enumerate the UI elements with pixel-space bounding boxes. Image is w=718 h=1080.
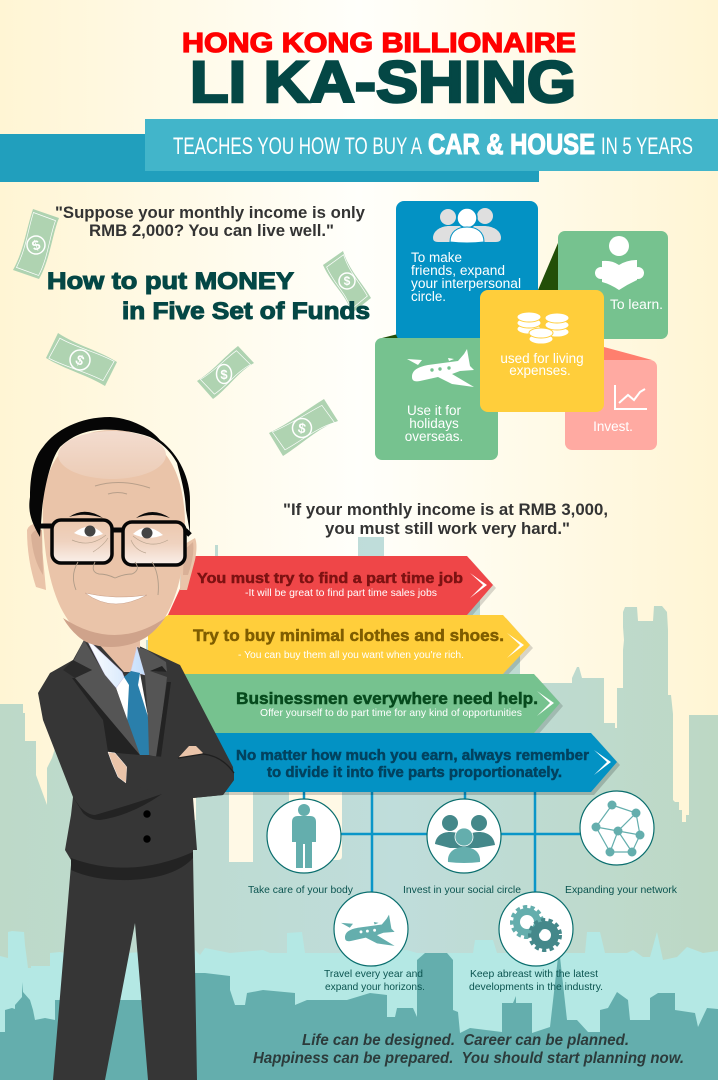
buttons — [143, 810, 151, 818]
panel: five funds cards — [375, 201, 668, 460]
eyes — [74, 527, 163, 538]
collar — [86, 638, 145, 688]
icon: person — [292, 816, 316, 868]
bill 3: $ — [73, 351, 87, 369]
shirt — [116, 673, 149, 755]
bill 5 — [269, 399, 338, 456]
arrow: part time job: You must try to find a part time job — [197, 570, 463, 587]
left lapel shadow — [72, 678, 140, 755]
forehead highlight — [58, 431, 166, 479]
quote: RMB 2,000: "Suppose your monthly income is only — [55, 203, 366, 222]
circle labels — [248, 884, 678, 993]
circle labels: Expanding your network — [565, 884, 678, 896]
lenses — [52, 520, 112, 563]
arrow: five parts: No matter how much you earn, always remember — [236, 747, 589, 764]
ears — [27, 524, 46, 590]
circle labels: expand your horizons. — [325, 981, 425, 993]
arrow: businessmen: Offer yourself to do part time for any kind of opportunities — [260, 707, 522, 719]
bill 2 — [323, 251, 371, 313]
forearm outline — [178, 754, 234, 773]
left hand — [108, 752, 127, 783]
card: living expenses — [480, 290, 604, 412]
flying money bills — [13, 209, 371, 456]
chin shadow — [63, 618, 165, 647]
card text: To make — [411, 250, 462, 265]
card: learn: To learn. — [610, 297, 663, 312]
banner text: TEACHES YOU HOW TO BUY A — [173, 133, 422, 160]
closing message: Happiness can be prepared. You should start planning now. — [253, 1050, 684, 1067]
banner text — [173, 129, 693, 161]
card: living expenses: used for living — [500, 351, 584, 366]
card: learn — [558, 231, 668, 339]
character: businessman — [27, 417, 234, 1080]
bill 4: $ — [220, 367, 228, 382]
hair — [29, 417, 190, 537]
connectors — [304, 790, 590, 895]
card: holidays: holidays — [409, 416, 459, 431]
right lapel edge — [156, 682, 171, 757]
bill 2: $ — [344, 274, 351, 288]
eye wrinkles — [72, 535, 168, 553]
trousers — [53, 855, 197, 1080]
circle labels: Invest in your social circle — [403, 884, 521, 896]
card: invest: Invest. — [593, 419, 633, 434]
card: living expenses: expenses. — [509, 363, 571, 378]
arrow: minimal clothes — [148, 615, 533, 677]
circle: travel — [334, 892, 408, 966]
bill 4 — [197, 346, 254, 399]
circle: body — [267, 799, 341, 873]
heading: how to put money — [47, 268, 370, 325]
mouth — [85, 593, 147, 604]
title: Li Ka-Shing: LI KA-SHING — [190, 50, 576, 115]
icon: plane — [407, 349, 474, 387]
circle: industry — [499, 892, 573, 966]
closing message — [253, 1032, 684, 1067]
right hand — [178, 746, 203, 758]
icon: network graph — [592, 800, 644, 856]
left lapel notch — [63, 660, 92, 678]
title: Hong Kong Billionaire: HONG KONG BILLIONAIRE — [182, 27, 576, 58]
skyline: middle layer — [0, 931, 718, 1080]
icon: gears — [512, 907, 560, 950]
skyline: back layer — [0, 537, 718, 1000]
card text — [411, 250, 521, 304]
quote: RMB 2,000 — [55, 203, 366, 240]
icon: coins — [517, 312, 569, 344]
card: holidays: overseas. — [405, 429, 463, 444]
quote: RMB 3,000 — [283, 500, 608, 538]
bill 1: $ — [30, 236, 43, 254]
circle: network — [580, 791, 654, 865]
circle labels: Keep abreast with the latest — [470, 968, 598, 980]
bill 1 — [13, 209, 59, 279]
jacket — [38, 640, 234, 875]
card: holidays — [375, 338, 498, 460]
card: friends — [396, 201, 538, 341]
icon: group — [435, 815, 495, 863]
card text: friends, expand — [411, 263, 505, 278]
arrow: businessmen: Businessmen everywhere need help. — [236, 689, 538, 708]
bill 5: $ — [297, 419, 307, 437]
arrow: businessmen — [150, 674, 563, 736]
banner — [0, 119, 718, 182]
circle labels: Travel every year and — [324, 968, 423, 980]
icon: line chart — [615, 385, 647, 409]
fold shadows — [538, 243, 558, 290]
card text: circle. — [411, 289, 446, 304]
eyebrows — [69, 512, 170, 518]
card text: your interpersonal — [411, 276, 521, 291]
right lapel notch — [150, 666, 167, 672]
closing message: Life can be designed. Career can be planned. — [302, 1032, 629, 1049]
crossed forearm — [117, 753, 234, 798]
sleeve crease — [73, 794, 162, 820]
left lapel — [73, 640, 140, 755]
icon: people — [433, 208, 501, 243]
face — [43, 430, 185, 645]
arrow: part time job: -It will be great to find part time sales jobs — [245, 588, 437, 599]
waist band — [71, 852, 193, 880]
icon: plane — [341, 915, 395, 946]
circle labels: developments in the industry. — [469, 981, 603, 993]
arrow: minimal clothes: Try to buy minimal clothes and shoes. — [193, 626, 504, 645]
arrow: five parts — [150, 733, 620, 795]
arrow: five parts: to divide it into five parts proportionately. — [267, 764, 562, 781]
arrow: part time job — [168, 556, 496, 618]
arrow: minimal clothes: - You can buy them all you want when you're rich. — [238, 650, 464, 661]
bill 3 — [46, 333, 117, 386]
neck — [86, 630, 140, 672]
icon: reader — [595, 236, 644, 290]
skyline: front layer — [0, 953, 718, 1080]
right lapel — [137, 647, 167, 757]
circle labels: Take care of your body — [248, 884, 354, 896]
quote: RMB 3,000: you must still work very hard." — [325, 519, 570, 538]
banner text: CAR & HOUSE — [428, 129, 595, 161]
circle: social — [427, 799, 501, 873]
heading: how to put money: How to put MONEY — [47, 268, 294, 295]
heading: how to put money: in Five Set of Funds — [122, 298, 370, 325]
tie — [124, 671, 149, 755]
quote: RMB 3,000: "If your monthly income is at RMB 3,000, — [283, 500, 608, 519]
glasses frames — [40, 520, 190, 565]
nose and smile lines — [73, 562, 158, 595]
forehead lines — [95, 482, 150, 494]
card: holidays: Use it for — [407, 403, 462, 418]
card: invest — [565, 360, 657, 450]
quote: RMB 2,000: RMB 2,000? You can live well." — [89, 221, 334, 240]
